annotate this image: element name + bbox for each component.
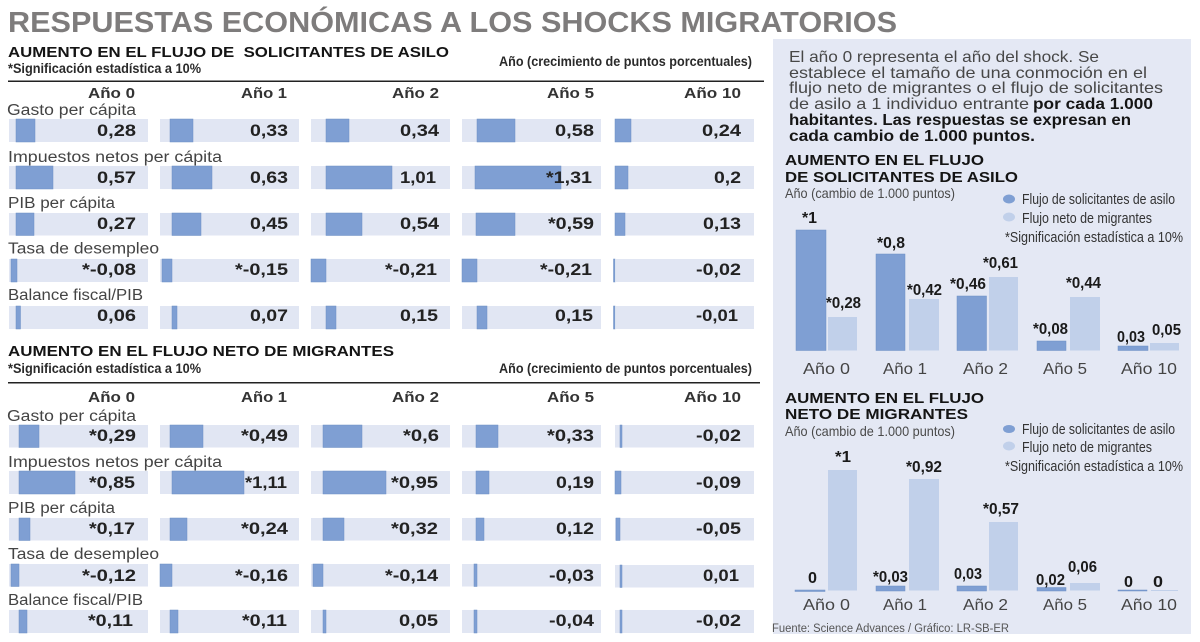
row: Balance fiscal/PIB: 0,06: [97, 307, 136, 325]
x axis labels: [803, 597, 1177, 614]
x axis labels: Año 5: [1043, 361, 1087, 378]
column headers: Año 5: [547, 389, 594, 406]
bars: asylum seekers: [796, 230, 1148, 350]
row: Gasto per cápita: *0,33: [547, 427, 594, 445]
value labels: *0,08: [1033, 321, 1068, 338]
value labels: 0: [1153, 574, 1163, 591]
row: Balance fiscal/PIB: 0,05: [399, 612, 438, 630]
legend: Flujo de solicitantes de asilo: [1022, 422, 1175, 438]
text block: explanation: [789, 49, 1163, 145]
text block: explanation: habitantes. Las respuestas se expresan en: [789, 112, 1131, 129]
column headers: Año 1: [241, 85, 287, 102]
row: Impuestos netos per cápita: *0,95: [391, 474, 438, 492]
row: Impuestos netos per cápita: *1,31: [546, 169, 592, 187]
row: Tasa de desempleo: 0,01: [703, 567, 739, 585]
column headers: [88, 389, 741, 406]
x axis labels: Año 1: [883, 597, 927, 614]
value labels: 0,03: [954, 566, 982, 583]
x axis labels: Año 0: [803, 597, 850, 614]
panel: table asylum seekers: [7, 44, 764, 329]
x axis labels: Año 10: [1121, 597, 1177, 614]
row: Balance fiscal/PIB: -0,01: [696, 307, 738, 325]
text block: explanation: por cada 1.000: [1033, 96, 1153, 113]
row: PIB per cápita: *0,32: [391, 520, 438, 538]
column headers: Año 10: [684, 389, 741, 406]
row: Tasa de desempleo: *-0,12: [82, 567, 136, 585]
row: PIB per cápita: 0,12: [556, 520, 594, 538]
column headers: Año 2: [392, 85, 439, 102]
text block: explanation: flujo neto de migrantes o el flujo de solicitantes: [789, 80, 1163, 97]
row: PIB per cápita: [8, 195, 754, 236]
source note: Fuente: Science Advances / Gráfico: LR-SB-ER: [772, 623, 1009, 635]
value labels: [802, 210, 1181, 346]
row: Impuestos netos per cápita: 0,57: [97, 169, 136, 187]
row: Gasto per cápita: Gasto per cápita: [7, 408, 136, 425]
row: PIB per cápita: 0,54: [400, 215, 440, 233]
row: PIB per cápita: *0,17: [89, 520, 135, 538]
x axis labels: Año 1: [883, 361, 927, 378]
row: Tasa de desempleo: *-0,14: [385, 567, 439, 585]
row: PIB per cápita: PIB per cápita: [8, 500, 115, 517]
row: Impuestos netos per cápita: [8, 454, 754, 494]
chart heading: [785, 390, 984, 423]
value labels: *0,28: [826, 295, 861, 312]
value labels: *0,92: [906, 459, 942, 476]
value labels: *0,8: [877, 235, 905, 252]
x axis labels: [803, 361, 1177, 378]
value labels: [808, 449, 1163, 591]
column headers: Año 2: [392, 389, 439, 406]
row: Balance fiscal/PIB: *0,11: [242, 612, 287, 630]
row: PIB per cápita: [8, 500, 754, 540]
chart: net migrants flow: [785, 390, 1183, 614]
row: Tasa de desempleo: Tasa de desempleo: [8, 240, 159, 258]
row: PIB per cápita: 0,27: [97, 215, 136, 233]
x axis labels: Año 2: [963, 597, 1008, 614]
chart heading: AUMENTO EN EL FLUJO: [785, 390, 984, 407]
row: Gasto per cápita: 0,33: [250, 122, 288, 140]
text block: explanation: establece el tamaño de una conmoción en el: [789, 65, 1147, 82]
chart: asylum seekers flow: [785, 152, 1183, 378]
row: Gasto per cápita: 0,28: [97, 122, 136, 140]
column headers: Año 0: [88, 85, 135, 102]
column headers: Año 0: [88, 389, 135, 406]
x axis labels: Año 5: [1043, 597, 1087, 614]
value labels: *1: [802, 210, 817, 227]
row: Gasto per cápita: [7, 408, 754, 448]
note: units: Año (crecimiento de puntos porcentuales): [499, 53, 752, 69]
legend: Flujo neto de migrantes: [1022, 211, 1152, 227]
row: Balance fiscal/PIB: [8, 592, 754, 633]
row: Gasto per cápita: Gasto per cápita: [7, 102, 136, 119]
legend: [1003, 192, 1183, 246]
row: Tasa de desempleo: *-0,21: [385, 261, 437, 279]
row: Impuestos netos per cápita: Impuestos netos per cápita: [8, 454, 222, 471]
row: Gasto per cápita: *0,49: [241, 427, 288, 445]
row: Balance fiscal/PIB: [8, 287, 754, 329]
row: Impuestos netos per cápita: 1,01: [400, 169, 436, 187]
row: Gasto per cápita: [7, 102, 754, 142]
heading: asylum seekers table: AUMENTO EN EL FLUJO DE SOLICITANTES DE ASILO: [8, 44, 449, 61]
row: Balance fiscal/PIB: *0,11: [88, 612, 133, 630]
row: Impuestos netos per cápita: [8, 149, 754, 189]
row: Tasa de desempleo: -0,02: [696, 261, 741, 279]
column headers: Año 1: [241, 389, 287, 406]
value labels: *0,46: [950, 276, 986, 293]
row: Balance fiscal/PIB: 0,15: [555, 307, 593, 325]
row: Tasa de desempleo: -0,03: [549, 567, 594, 585]
text block: explanation: El año 0 representa el año del shock. Se: [789, 49, 1099, 66]
row: Tasa de desempleo: *-0,21: [540, 261, 592, 279]
x axis labels: Año 2: [963, 361, 1008, 378]
row: Balance fiscal/PIB: Balance fiscal/PIB: [8, 287, 143, 304]
row: PIB per cápita: *0,24: [241, 520, 289, 538]
row: Impuestos netos per cápita: 0,19: [556, 474, 594, 492]
text block: explanation: cada cambio de 1.000 puntos.: [789, 128, 1035, 145]
bars: net migrants: [828, 277, 1179, 350]
row: PIB per cápita: PIB per cápita: [8, 195, 115, 212]
value labels: *0,61: [983, 255, 1018, 272]
row: Balance fiscal/PIB: -0,04: [549, 612, 595, 630]
row: Balance fiscal/PIB: 0,07: [250, 307, 288, 325]
heading: net migrants table: AUMENTO EN EL FLUJO NETO DE MIGRANTES: [8, 343, 394, 360]
row: Gasto per cápita: *0,6: [403, 427, 439, 445]
row: Tasa de desempleo: Tasa de desempleo: [8, 546, 159, 563]
row: Gasto per cápita: *0,29: [89, 427, 136, 445]
text block: explanation: de asilo a 1 individuo entrante: [789, 96, 1029, 113]
row: PIB per cápita: -0,05: [696, 520, 741, 538]
column headers: Año 10: [684, 85, 741, 102]
row: PIB per cápita: *0,59: [548, 215, 594, 233]
row: Tasa de desempleo: *-0,16: [235, 567, 288, 585]
x axis labels: Año 0: [803, 361, 850, 378]
note: significance: *Significación estadística a 10%: [8, 360, 201, 376]
row: Tasa de desempleo: *-0,15: [235, 261, 288, 279]
x axis labels: Año 10: [1121, 361, 1177, 378]
bars: net migrants: [828, 470, 1178, 591]
title: RESPUESTAS ECONÓMICAS A LOS SHOCKS MIGRATORIOS: [8, 7, 897, 39]
row: PIB per cápita: 0,13: [703, 215, 741, 233]
value labels: *0,42: [907, 282, 942, 299]
value labels: 0,05: [1152, 322, 1181, 339]
row: Gasto per cápita: 0,24: [702, 122, 742, 140]
row: Balance fiscal/PIB: Balance fiscal/PIB: [8, 592, 143, 609]
row: Impuestos netos per cápita: Impuestos netos per cápita: [8, 149, 222, 166]
row: Impuestos netos per cápita: *0,85: [89, 474, 135, 492]
chart heading: NETO DE MIGRANTES: [785, 406, 968, 423]
chart heading: DE SOLICITANTES DE ASILO: [785, 169, 1018, 186]
legend: [1003, 422, 1183, 475]
row: PIB per cápita: 0,45: [250, 215, 288, 233]
row: Impuestos netos per cápita: -0,09: [696, 474, 741, 492]
panel: side column: [772, 39, 1191, 635]
row: Gasto per cápita: -0,02: [696, 427, 741, 445]
row: Tasa de desempleo: [8, 546, 754, 588]
chart heading: AUMENTO EN EL FLUJO: [785, 152, 984, 169]
row: Tasa de desempleo: [8, 240, 754, 282]
column headers: [88, 85, 741, 102]
row: Impuestos netos per cápita: 0,2: [714, 169, 741, 187]
legend: Flujo neto de migrantes: [1022, 440, 1152, 456]
value labels: 0: [1124, 574, 1133, 591]
note: units: Año (crecimiento de puntos porcentuales): [499, 360, 752, 376]
value labels: *0,57: [983, 501, 1019, 518]
chart subtitle: Año (cambio de 1.000 puntos): [785, 185, 955, 201]
bars: asylum seekers: [795, 586, 1147, 592]
value labels: 0,03: [1117, 329, 1145, 346]
value labels: *1: [835, 449, 851, 466]
value labels: 0,02: [1036, 572, 1065, 589]
row: Gasto per cápita: 0,58: [555, 122, 594, 140]
row: Impuestos netos per cápita: 0,63: [250, 169, 288, 187]
row: Balance fiscal/PIB: 0,15: [400, 307, 438, 325]
row: Tasa de desempleo: *-0,08: [82, 261, 136, 279]
row: Gasto per cápita: 0,34: [400, 122, 440, 140]
chart heading: [785, 152, 1018, 186]
column headers: Año 5: [547, 85, 594, 102]
row: Impuestos netos per cápita: *1,11: [245, 474, 287, 492]
value labels: *0,44: [1066, 275, 1101, 292]
chart subtitle: Año (cambio de 1.000 puntos): [785, 423, 955, 439]
value labels: 0: [808, 570, 817, 587]
value labels: *0,03: [873, 569, 908, 586]
legend: Flujo de solicitantes de asilo: [1022, 192, 1175, 208]
value labels: 0,06: [1068, 559, 1097, 576]
panel: table net migrants: [7, 343, 760, 633]
row: Balance fiscal/PIB: -0,02: [696, 612, 741, 630]
note: significance: *Significación estadística a 10%: [8, 60, 201, 76]
